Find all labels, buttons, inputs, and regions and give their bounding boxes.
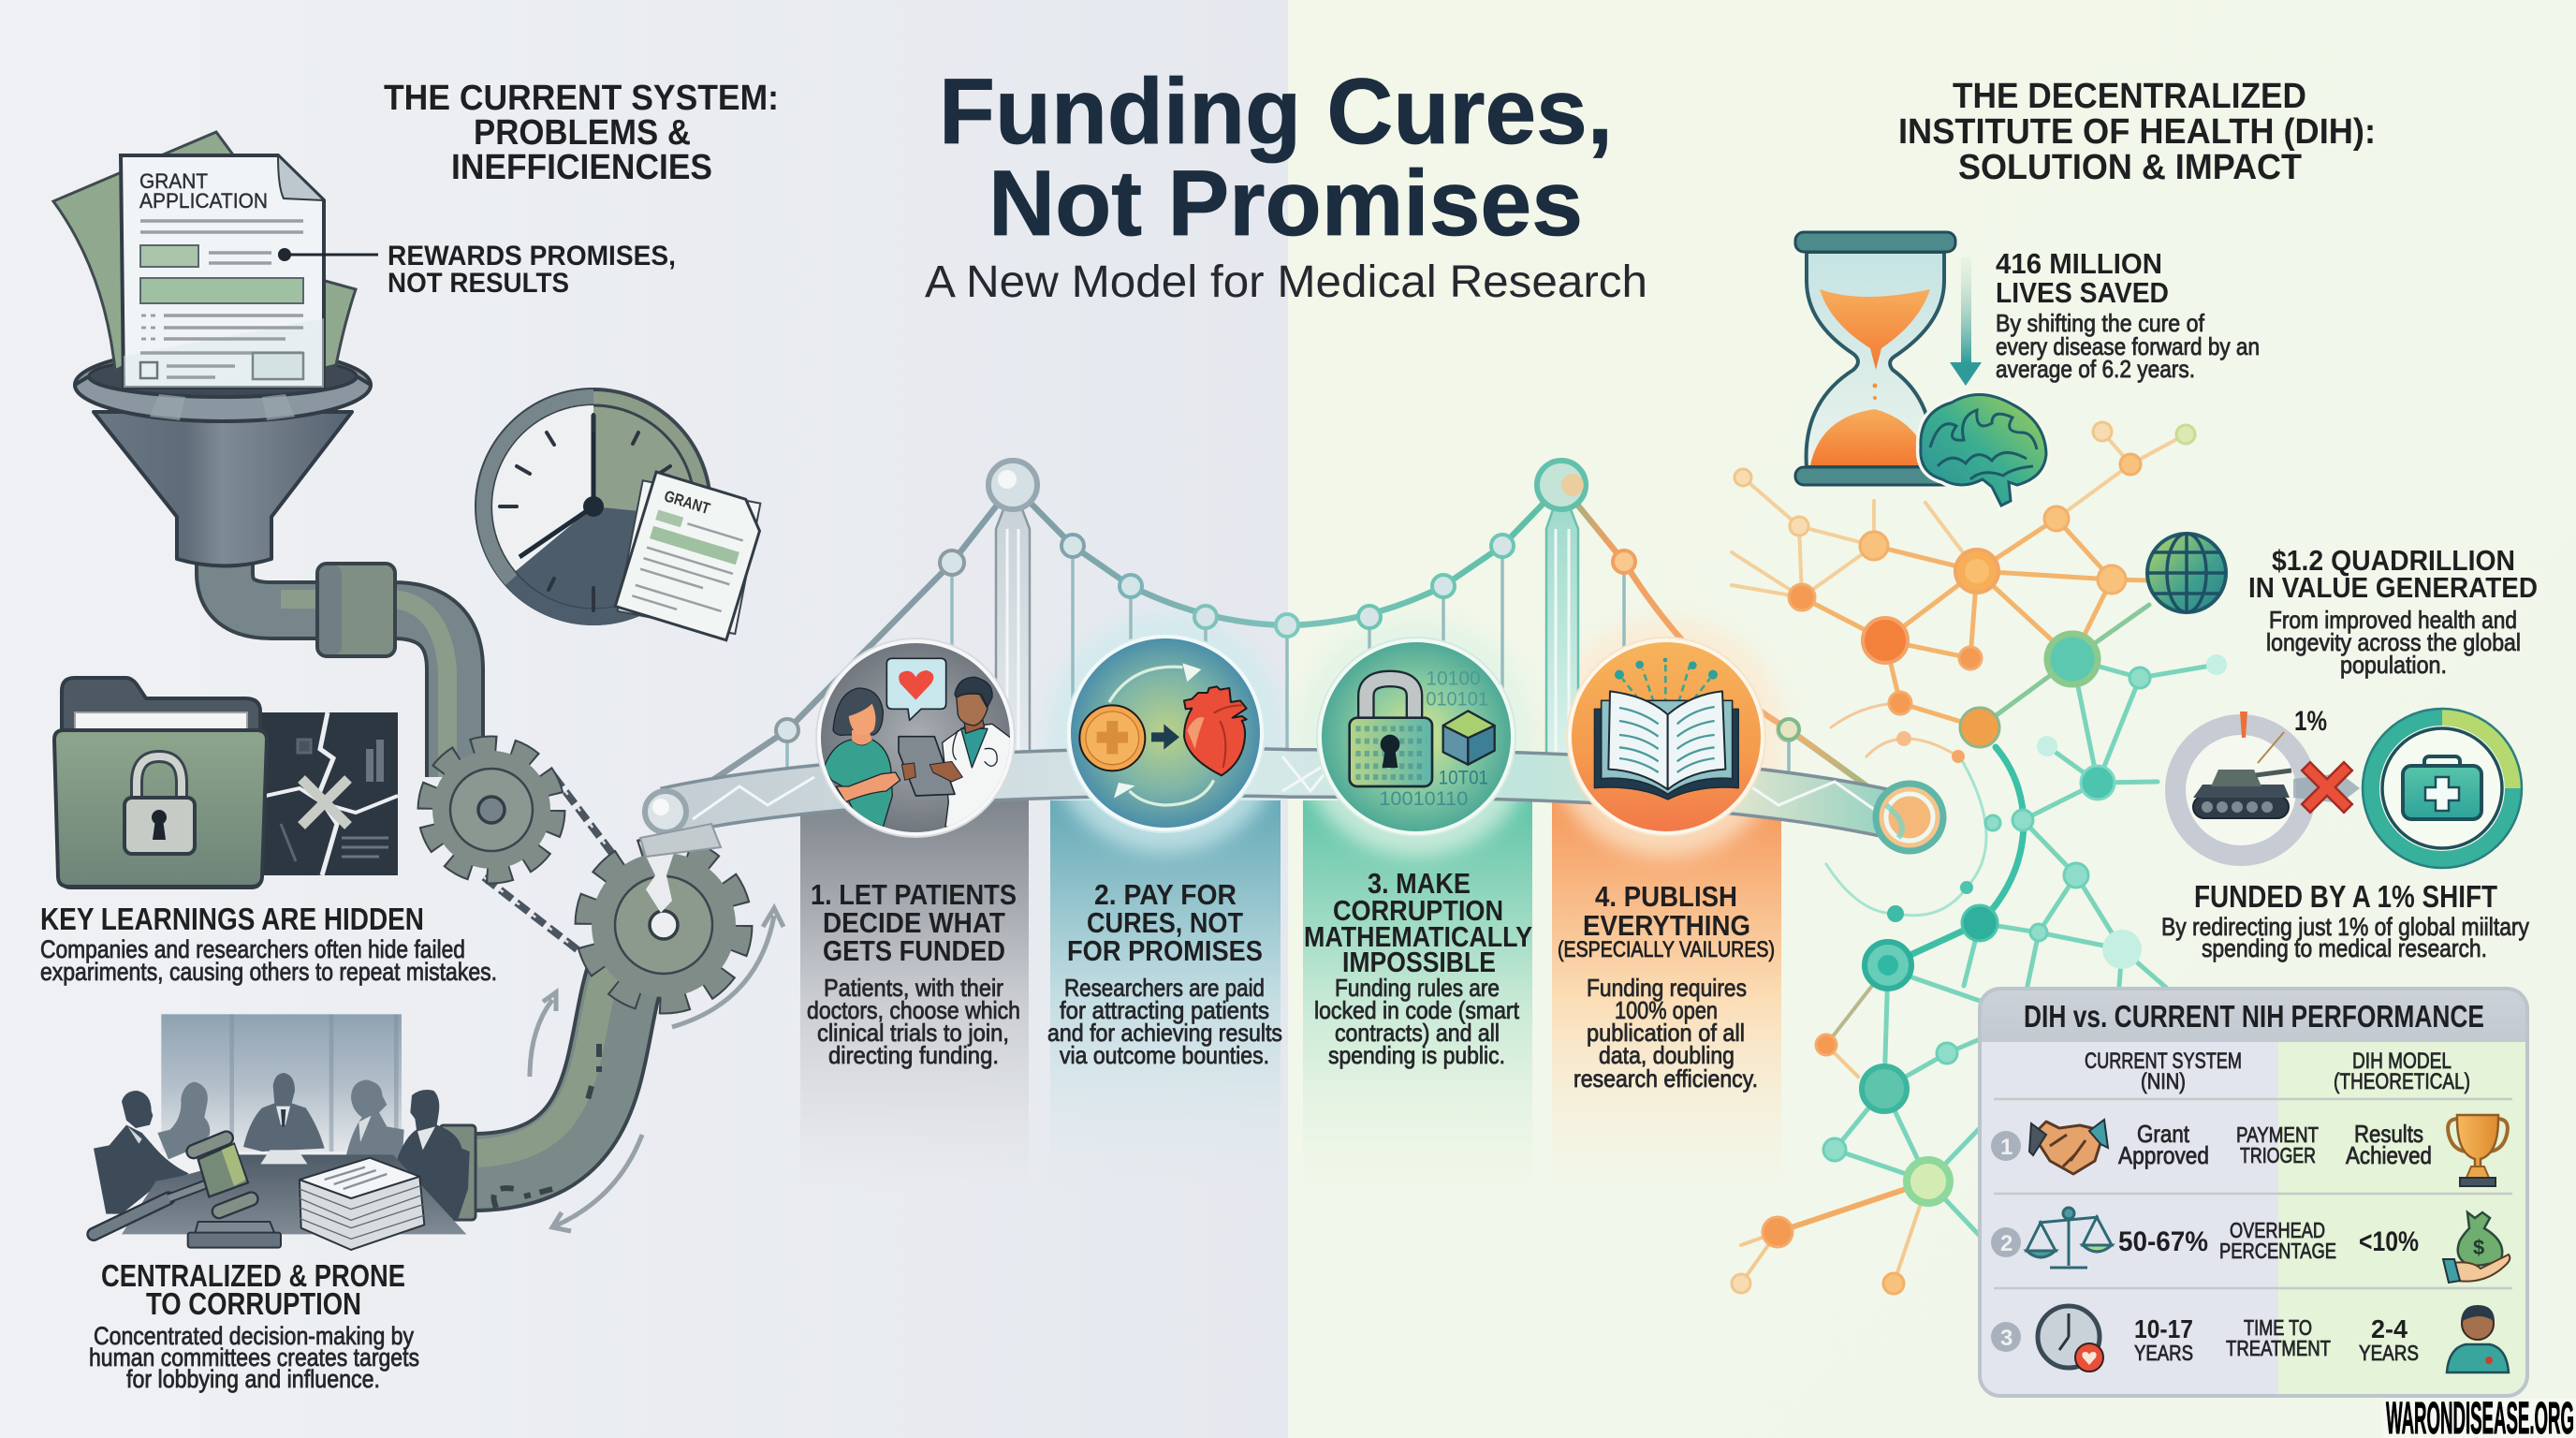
step 4: publish everything: Funding requires bbox=[1587, 974, 1747, 1002]
step 1: let patients decide: clinical trials to join, bbox=[817, 1019, 1009, 1047]
binary digits: 10T01 bbox=[1439, 766, 1488, 788]
sand bottom bbox=[1810, 409, 1930, 465]
icon: clock with heart bbox=[2038, 1306, 2103, 1372]
panel: current system heading: INEFFICIENCIES bbox=[451, 148, 712, 187]
doctor bbox=[943, 677, 1011, 827]
row 1: payment trigger: Approved bbox=[2118, 1141, 2209, 1169]
text: value generated bbox=[2248, 544, 2538, 679]
step 2: pay for cures: and for achieving results bbox=[1047, 1019, 1282, 1047]
text: key learnings are hidden: expariments, causing others to repeat mistakes. bbox=[40, 958, 497, 986]
gear two bbox=[585, 835, 742, 1004]
row 2: overhead percentage: <10% bbox=[2359, 1226, 2419, 1257]
step 3: make corruption impossible: spending is public. bbox=[1328, 1041, 1505, 1069]
sand top bbox=[1820, 289, 1930, 370]
panel: current system heading: PROBLEMS & bbox=[474, 113, 691, 153]
funnel rim front bbox=[75, 376, 371, 421]
icon circle 3: corruption proof lock bbox=[1317, 638, 1515, 836]
cube bbox=[1443, 711, 1495, 765]
icon: hourglass bbox=[1795, 232, 1955, 485]
icon: committee room with gavel bbox=[94, 1014, 470, 1250]
step 4: publish everything: EVERYTHING bbox=[1583, 909, 1750, 942]
column headers: (NIN) bbox=[2141, 1069, 2186, 1094]
text: centralized and prone to corruption: for lobbying and influence. bbox=[126, 1365, 380, 1393]
icon: handshake bbox=[2029, 1120, 2108, 1174]
1 percent label: 1% bbox=[2294, 706, 2327, 737]
panel: current system heading: THE CURRENT SYSTEM: bbox=[384, 79, 779, 118]
network nodes orange bbox=[1732, 422, 2195, 1294]
tank bbox=[2193, 770, 2291, 818]
row 3: time to treatment bbox=[1991, 1305, 2509, 1372]
icon: healthy person bbox=[2447, 1305, 2509, 1372]
main title: Funding Cures, bbox=[939, 59, 1613, 163]
step 2: pay for cures: for attracting patients bbox=[1060, 996, 1269, 1024]
step 3: make corruption impossible: 3. MAKE bbox=[1368, 867, 1471, 900]
icon circle 1: patients and doctors bbox=[814, 637, 1020, 838]
step 4: publish everything: research efficiency. bbox=[1573, 1064, 1758, 1093]
coin bbox=[1079, 705, 1145, 770]
step 2: pay for cures: CURES, NOT bbox=[1087, 906, 1243, 939]
panel: decentralized institute heading: INSTITUTE OF HEALTH (DIH): bbox=[1898, 112, 2376, 152]
background: left half bbox=[0, 0, 1288, 1438]
network edges bbox=[1732, 432, 2217, 1284]
step 3: make corruption impossible: CORRUPTION bbox=[1333, 894, 1503, 927]
row 2: overhead percentage: 2 bbox=[2000, 1231, 2012, 1256]
padlock bbox=[124, 756, 195, 854]
icon: locked folder with hidden data bbox=[54, 678, 398, 888]
icon circle 2: pay for cures bbox=[1066, 634, 1265, 832]
network nodes teal bbox=[1778, 634, 2227, 1203]
step 4: publish everything: (ESPECIALLY VAILURES) bbox=[1558, 937, 1775, 962]
step 3: make corruption impossible: MATHEMATICALLY bbox=[1304, 920, 1532, 953]
callout: rewards promises: REWARDS PROMISES, bbox=[388, 241, 676, 271]
row 1: payment trigger: Grant bbox=[2137, 1120, 2190, 1148]
icon: scales bbox=[2027, 1208, 2112, 1268]
gavel bbox=[94, 1138, 281, 1248]
panel: decentralized institute heading bbox=[1898, 77, 2376, 187]
step 1: let patients decide: directing funding. bbox=[828, 1041, 999, 1069]
funnel cone bbox=[94, 412, 352, 565]
step 4: publish everything: 100% open bbox=[1615, 996, 1718, 1024]
grant paper stack: GRANT bbox=[662, 487, 712, 518]
text: funded by a 1% shift bbox=[2161, 879, 2529, 962]
main title bbox=[939, 59, 1613, 255]
panel: decentralized institute heading: THE DECENTRALIZED bbox=[1953, 77, 2306, 116]
binary digits: 10100 bbox=[1426, 668, 1481, 690]
step 3: make corruption impossible: Funding rules are bbox=[1335, 974, 1500, 1002]
step 4: publish everything: publication of all bbox=[1587, 1019, 1745, 1047]
text: key learnings are hidden: KEY LEARNINGS ARE HIDDEN bbox=[40, 902, 424, 936]
row 2: overhead percentage: PERCENTAGE bbox=[2219, 1239, 2336, 1263]
row 3: time to treatment: 3 bbox=[2000, 1326, 2012, 1351]
text: funded by a 1% shift: FUNDED BY A 1% SHIFT bbox=[2194, 879, 2497, 914]
icon: funnel with grant application bbox=[53, 132, 378, 565]
sprouts bbox=[1614, 657, 1719, 700]
text: centralized and prone to corruption: CENTRALIZED & PRONE bbox=[101, 1258, 405, 1293]
step 1: let patients decide: DECIDE WHAT bbox=[823, 906, 1005, 939]
patient bbox=[824, 688, 900, 827]
row 3: time to treatment: YEARS bbox=[2359, 1341, 2419, 1365]
text: centralized and prone to corruption: Concentrated decision-making by bbox=[94, 1322, 414, 1350]
panel: current system heading bbox=[384, 79, 779, 187]
step 4: publish everything: data, doubling bbox=[1599, 1041, 1734, 1069]
text: centralized and prone to corruption: human committees creates targets bbox=[89, 1343, 419, 1372]
step 3: make corruption impossible: locked in code (smart bbox=[1314, 996, 1520, 1024]
glow behind icon circles bbox=[1046, 613, 1786, 857]
row 3: time to treatment: 2-4 bbox=[2371, 1314, 2408, 1343]
anatomical heart bbox=[1184, 686, 1247, 775]
step 4: publish everything: 4. PUBLISH bbox=[1595, 880, 1737, 913]
cable nodes bbox=[776, 535, 1799, 741]
paper stack bbox=[300, 1158, 424, 1250]
suspenders bbox=[787, 546, 1789, 796]
text: value generated: longevity across the global bbox=[2266, 628, 2521, 656]
text: key learnings are hidden bbox=[40, 902, 497, 986]
step 1: let patients decide: doctors, choose which bbox=[807, 996, 1020, 1024]
step 3: make corruption impossible: IMPOSSIBLE bbox=[1342, 946, 1496, 978]
row 3: time to treatment: TIME TO bbox=[2244, 1315, 2312, 1340]
grant application document bbox=[121, 155, 324, 388]
callout line bbox=[278, 248, 378, 261]
row 1: payment trigger bbox=[1991, 1115, 2508, 1186]
text: lives saved: every disease forward by an bbox=[1996, 332, 2260, 360]
main cables bbox=[666, 485, 1910, 817]
icon: brain bbox=[1921, 394, 2046, 506]
step 3: make corruption impossible bbox=[1304, 867, 1532, 1069]
icon: clock with grant paper bbox=[476, 389, 774, 646]
icon: trophy bbox=[2448, 1115, 2508, 1186]
text: lives saved: 416 MILLION bbox=[1996, 247, 2162, 280]
text: lives saved: By shifting the cure of bbox=[1996, 309, 2205, 337]
column headers: (THEORETICAL) bbox=[2334, 1069, 2470, 1094]
icon: connected gears bbox=[427, 745, 783, 1231]
green papers behind bbox=[53, 132, 281, 371]
column headers bbox=[2085, 1049, 2470, 1094]
step 1: let patients decide: GETS FUNDED bbox=[823, 934, 1005, 967]
column headers: DIH MODEL bbox=[2352, 1049, 2452, 1074]
row 1: payment trigger: 1 bbox=[2000, 1135, 2012, 1160]
arrow bbox=[1151, 724, 1179, 750]
row 3: time to treatment: 10-17 bbox=[2134, 1314, 2193, 1343]
column headers: CURRENT SYSTEM bbox=[2085, 1049, 2242, 1074]
step 2: pay for cures: FOR PROMISES bbox=[1067, 934, 1263, 967]
cycle arrows bbox=[1109, 667, 1182, 702]
table bbox=[122, 1154, 466, 1234]
text: lives saved bbox=[1996, 247, 2260, 383]
callout: rewards promises: NOT RESULTS bbox=[388, 268, 569, 299]
row 1: payment trigger: TRIOGER bbox=[2240, 1143, 2316, 1167]
text: key learnings are hidden: Companies and researchers often hide failed bbox=[40, 935, 465, 963]
deck bbox=[666, 772, 1905, 817]
padlock bbox=[1350, 679, 1432, 786]
icon circle 4: open book bbox=[1567, 638, 1765, 836]
row 2: overhead percentage: 50-67% bbox=[2118, 1226, 2208, 1257]
row 1: payment trigger: PAYMENT bbox=[2236, 1123, 2319, 1147]
row 3: time to treatment: TREATMENT bbox=[2226, 1336, 2331, 1360]
step 3: make corruption impossible: contracts) and all bbox=[1335, 1019, 1500, 1047]
chain bbox=[484, 775, 639, 964]
text: funded by a 1% shift: spending to medical research. bbox=[2202, 934, 2487, 962]
subtitle: A New Model for Medical Research bbox=[925, 257, 1647, 307]
rotation arrows bbox=[530, 908, 783, 1231]
binary digits: 10010110 bbox=[1379, 787, 1468, 810]
window bbox=[161, 1014, 402, 1152]
row 3: time to treatment: YEARS bbox=[2134, 1341, 2193, 1365]
bridge bbox=[640, 461, 1943, 857]
icon: globe bbox=[2147, 534, 2226, 612]
table background bbox=[1980, 989, 2527, 1396]
text: value generated: From improved health and bbox=[2269, 606, 2517, 634]
step 1: let patients decide: Patients, with their bbox=[824, 974, 1003, 1002]
step 2: pay for cures bbox=[1047, 878, 1282, 1069]
icon: military spending donut with tank bbox=[2175, 706, 2327, 856]
gear one bbox=[427, 745, 556, 874]
speech bubble bbox=[886, 658, 946, 720]
icon: medical kit ring bbox=[2363, 709, 2522, 868]
row 2: overhead percentage bbox=[1991, 1208, 2510, 1283]
row 1: payment trigger: Results bbox=[2354, 1120, 2423, 1148]
arrow: time shift down bbox=[1950, 257, 1982, 386]
callout: rewards promises bbox=[388, 241, 676, 299]
panel: performance table bbox=[1980, 989, 2527, 1396]
torn data panel bbox=[260, 712, 398, 875]
right anchor bbox=[1876, 784, 1943, 851]
text: value generated: $1.2 QUADRILLION bbox=[2272, 544, 2515, 577]
text: centralized and prone to corruption: TO CORRUPTION bbox=[146, 1286, 361, 1321]
icon: pipe from funnel bbox=[225, 552, 455, 777]
text: centralized and prone to corruption bbox=[89, 1258, 419, 1393]
grant application document: APPLICATION bbox=[139, 189, 268, 213]
icon: money bag in hand: $ bbox=[2473, 1236, 2484, 1259]
tower tops bbox=[988, 461, 1037, 509]
title block bbox=[925, 59, 1647, 307]
binary digits bbox=[1379, 668, 1488, 810]
text: lives saved: LIVES SAVED bbox=[1996, 276, 2169, 309]
panel: decentralized institute heading: SOLUTION & IMPACT bbox=[1958, 148, 2302, 187]
towers bbox=[996, 485, 1578, 777]
left anchor bbox=[645, 791, 686, 832]
step 2: pay for cures: Researchers are paid bbox=[1064, 974, 1265, 1002]
step 4: publish everything bbox=[1558, 880, 1775, 1093]
step 2: pay for cures: via outcome bounties. bbox=[1060, 1041, 1269, 1069]
main title: Not Promises bbox=[988, 151, 1583, 255]
funnel rim back bbox=[75, 348, 371, 421]
step 2: pay for cures: 2. PAY FOR bbox=[1094, 878, 1237, 911]
row 2: overhead percentage: OVERHEAD bbox=[2230, 1218, 2325, 1242]
column backgrounds bbox=[800, 800, 1781, 1189]
text: lives saved: average of 6.2 years. bbox=[1996, 355, 2195, 383]
tablet bbox=[899, 737, 962, 796]
icon: money bag in hand bbox=[2443, 1212, 2510, 1283]
committee members bbox=[94, 1073, 470, 1222]
step 1: let patients decide: 1. LET PATIENTS bbox=[811, 878, 1017, 911]
book bbox=[1594, 691, 1738, 800]
text: value generated: IN VALUE GENERATED bbox=[2248, 571, 2538, 604]
grant paper stack bbox=[604, 468, 774, 646]
grant application document: GRANT bbox=[139, 169, 208, 193]
binary digits: 010101 bbox=[1426, 687, 1488, 710]
icon: redirect cross bbox=[2293, 770, 2360, 804]
row 1: payment trigger: Achieved bbox=[2346, 1141, 2432, 1169]
text: value generated: population. bbox=[2340, 651, 2447, 679]
icon: lower broken pipe bbox=[440, 964, 629, 1220]
network: decentralized nodes bbox=[1732, 422, 2227, 1294]
background: right half bbox=[1288, 0, 2576, 1438]
step 1: let patients decide bbox=[807, 878, 1020, 1069]
